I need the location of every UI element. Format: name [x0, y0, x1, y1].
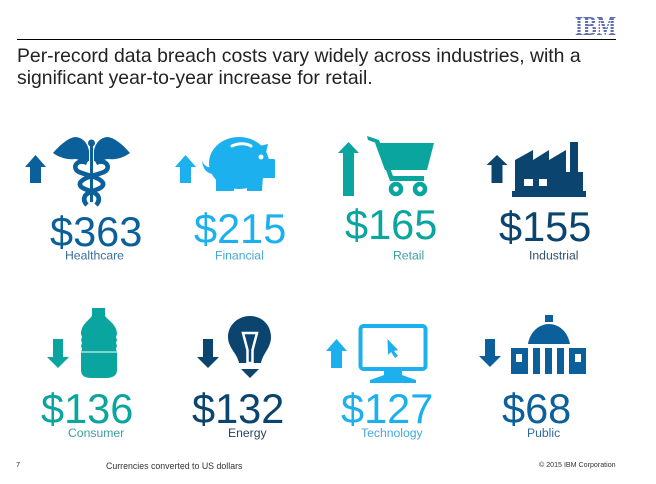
value: industrial: $155	[499, 203, 591, 250]
arrow down: public	[479, 339, 501, 367]
label: energy: Energy	[228, 426, 268, 440]
icon: capitol building	[511, 315, 586, 374]
panel: technology	[326, 326, 433, 440]
label: financial: Financial	[215, 248, 264, 262]
panel: retail	[338, 136, 437, 262]
value: consumer: $136	[41, 385, 133, 432]
arrow up: industrial	[486, 155, 508, 183]
label: public: Public	[527, 426, 560, 440]
title: Per-record data breach costs vary widely across industries, with a	[17, 45, 581, 67]
value: financial: $215	[194, 205, 286, 252]
arrow up: financial	[175, 155, 196, 183]
arrow up: retail	[338, 142, 359, 196]
arrow up: technology	[326, 339, 347, 368]
icon: water bottle	[80, 308, 118, 378]
arrow up: healthcare	[25, 155, 46, 183]
label: technology: Technology	[361, 426, 424, 440]
label: industrial: Industrial	[529, 248, 578, 262]
icon: factory	[512, 142, 586, 197]
label: consumer: Consumer	[68, 426, 124, 440]
value: technology: $127	[341, 385, 433, 432]
icon: caduceus	[53, 137, 130, 205]
icon: piggy bank	[202, 137, 275, 191]
panel: healthcare	[25, 137, 142, 262]
label: healthcare: Healthcare	[65, 248, 124, 262]
arrow down: energy	[197, 339, 219, 368]
panel: consumer	[41, 308, 133, 440]
icon: light bulb	[228, 316, 271, 378]
panel: public	[479, 315, 586, 440]
icon: monitor	[360, 326, 426, 383]
value: healthcare: $363	[50, 208, 142, 255]
panel: financial	[175, 137, 286, 262]
panel: industrial	[486, 142, 591, 262]
page number: 7	[16, 460, 20, 469]
value: public: $68	[502, 385, 571, 432]
copyright: © 2015 IBM Corporation	[539, 461, 616, 469]
panel: energy	[192, 316, 284, 440]
title: significant year-to-year increase for retail.	[17, 67, 373, 89]
value: retail: $165	[345, 201, 437, 248]
footnote: currencies: Currencies converted to US dollars	[106, 461, 243, 471]
label: retail: Retail	[393, 248, 424, 262]
IBM logo: IBM	[575, 11, 616, 41]
icon: shopping cart	[367, 136, 434, 194]
value: energy: $132	[192, 385, 284, 432]
arrow down: consumer	[47, 339, 69, 368]
